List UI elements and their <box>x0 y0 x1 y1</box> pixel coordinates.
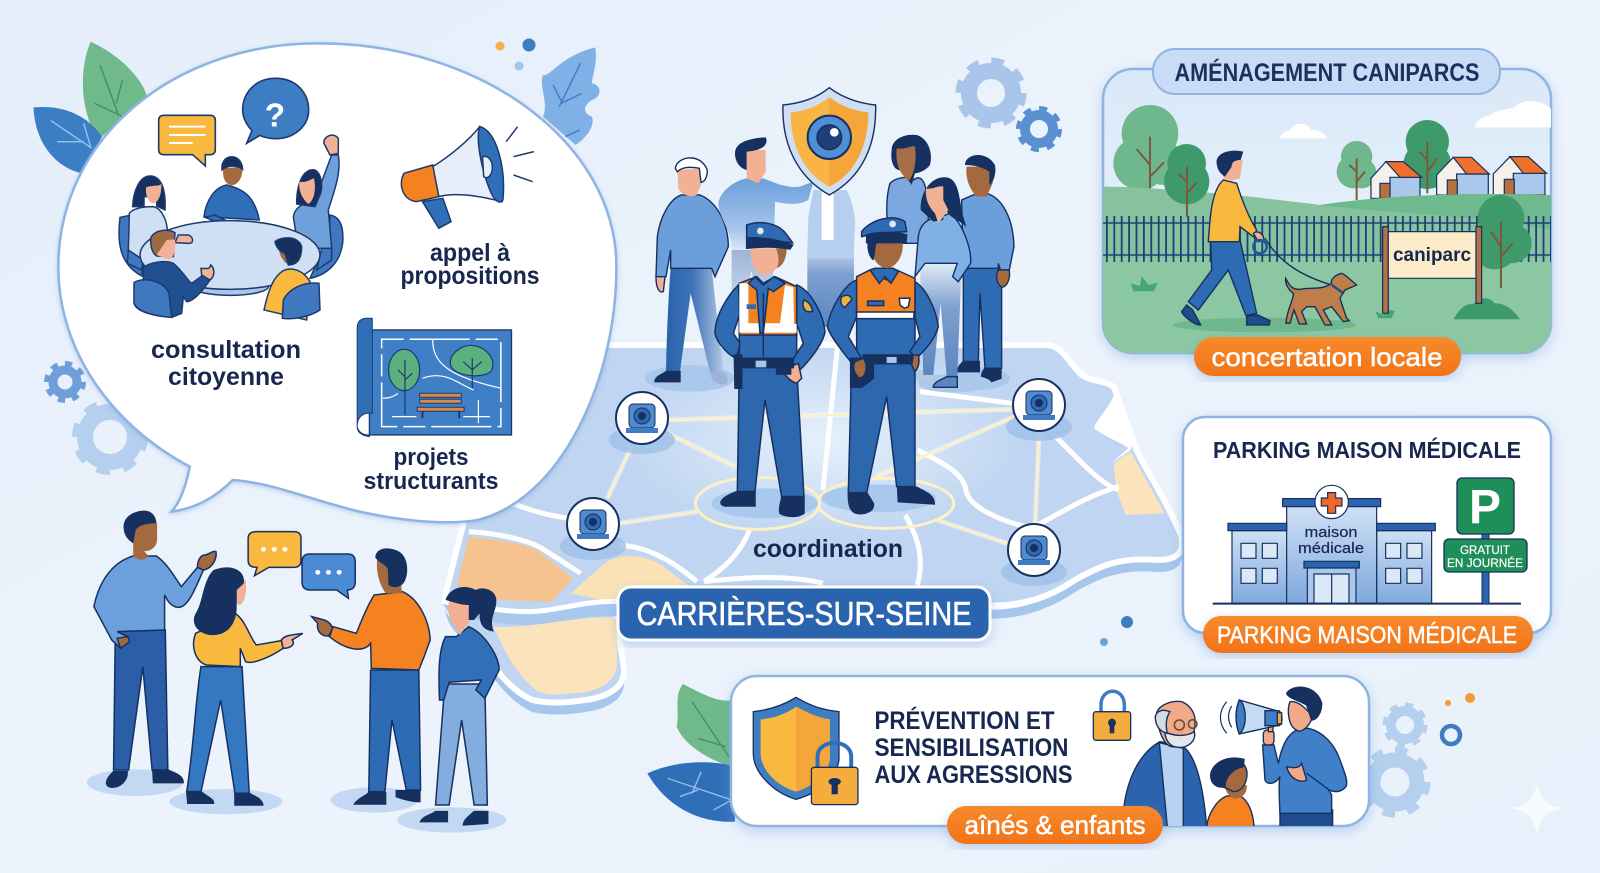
gears: bottom right <box>1363 693 1475 814</box>
leaves behind speech bubble <box>33 42 600 173</box>
sign: caniparc <box>1383 227 1482 313</box>
police officers <box>715 218 938 516</box>
text: projets structurants: structurants <box>364 468 498 495</box>
tag: concertation locale <box>1194 337 1461 376</box>
text: prévention et sensibilisation: AUX AGRESSIONS <box>874 761 1072 789</box>
person: elder <box>1123 701 1207 827</box>
camera pin 3 <box>560 498 626 560</box>
map of the town <box>442 340 1182 714</box>
person: man with megaphone <box>1220 687 1347 827</box>
icon: megaphone <box>401 127 534 228</box>
decorative dots top <box>496 38 536 70</box>
town name label: CARRIÈRES-SUR-SEINE <box>636 595 972 632</box>
gears: left <box>47 364 144 471</box>
text: projets structurants: projets <box>394 444 468 471</box>
text: projets structurants <box>364 444 498 495</box>
text: appel à propositions: propositions <box>400 262 540 290</box>
text: appel à propositions <box>400 239 540 290</box>
person: dark-haired woman <box>887 135 931 243</box>
park scene <box>1103 101 1551 355</box>
person: officer left <box>715 223 825 516</box>
speech bubble panel <box>58 43 616 522</box>
leaves beside prevention panel <box>647 684 735 822</box>
text: consultation citoyenne: citoyenne <box>168 363 284 391</box>
person: woman with blue sweater <box>915 177 992 393</box>
people group discussing bottom-left <box>87 511 506 833</box>
person walking dog <box>1182 151 1357 325</box>
gears: top centre <box>960 62 1059 149</box>
text: consultation citoyenne: consultation <box>151 336 301 364</box>
people: elder, child and man with megaphone <box>1123 687 1347 827</box>
person: child <box>1207 758 1254 827</box>
dots right of map <box>1100 616 1133 646</box>
bubble shape <box>58 43 616 522</box>
sign: caniparc: caniparc <box>1393 245 1471 266</box>
icon: parking sign: EN JOURNÉE <box>1447 557 1523 570</box>
orange district <box>457 537 573 602</box>
person: medical staff behind shield <box>807 190 855 327</box>
person: white-haired man <box>645 158 735 392</box>
icon: parking sign: P <box>1469 481 1501 534</box>
person: woman in yellow top <box>170 567 303 814</box>
icon: medical building: médicale <box>1298 540 1364 557</box>
tag: aînés & enfants: aînés & enfants <box>964 810 1146 840</box>
person: woman with ponytail <box>397 587 506 833</box>
icon: medical building <box>1213 485 1521 604</box>
panel frame <box>731 676 1369 826</box>
text: prévention et sensibilisation <box>874 706 1072 789</box>
person: man in blue sweater <box>87 511 216 796</box>
icon: shield with padlock <box>753 697 858 805</box>
panel title <box>1153 49 1500 94</box>
icon: blue speech bubble <box>302 554 355 598</box>
panel title: PARKING MAISON MÉDICALE <box>1213 436 1521 463</box>
icon: shield with eye <box>783 88 876 195</box>
panel: parking maison médicale <box>1183 417 1551 653</box>
person: officer right <box>827 218 938 514</box>
icon: question bubble: ? <box>265 98 285 135</box>
icon: yellow speech bubble <box>248 532 301 576</box>
text: prévention et sensibilisation: SENSIBILISATION <box>874 734 1068 762</box>
panel: caniparcs <box>1103 49 1551 376</box>
person: man in orange top <box>312 548 430 813</box>
tag: parking maison médicale: PARKING MAISON MÉDICALE <box>1217 622 1517 649</box>
scene: citizens at round table <box>119 135 343 320</box>
houses <box>1371 157 1547 198</box>
icon: question bubble <box>243 78 309 143</box>
text: prévention et sensibilisation: PRÉVENTION ET <box>874 706 1054 735</box>
text: consultation citoyenne <box>151 336 301 391</box>
icon: medical building: maison <box>1304 524 1358 541</box>
camera pin 4 <box>1001 524 1067 586</box>
panel title: AMÉNAGEMENT CANIPARCS <box>1174 58 1480 87</box>
panel frame <box>1183 417 1551 633</box>
tag: aînés & enfants <box>947 806 1163 844</box>
icon: yellow message bubble <box>159 115 215 166</box>
tag: parking maison médicale <box>1203 616 1533 653</box>
panel frame <box>1103 69 1551 353</box>
person: man on the right <box>943 155 1014 390</box>
icon: parking sign <box>1444 478 1527 604</box>
text: appel à propositions: appel à <box>430 239 510 267</box>
panel: prévention <box>731 676 1369 844</box>
town name label <box>618 587 990 640</box>
icon: blueprint with park plan <box>357 318 511 437</box>
icon: parking sign: GRATUIT <box>1460 545 1510 557</box>
person: man behind shield <box>718 137 813 327</box>
camera pin 2 <box>1006 379 1072 441</box>
tag: concertation locale: concertation locale <box>1212 342 1442 372</box>
text: coordination: coordination <box>753 535 903 563</box>
citizens and shield behind agents <box>645 88 1014 393</box>
camera pin 1 <box>609 392 675 454</box>
sparkle <box>1510 782 1564 836</box>
icon: padlock <box>1093 691 1131 740</box>
